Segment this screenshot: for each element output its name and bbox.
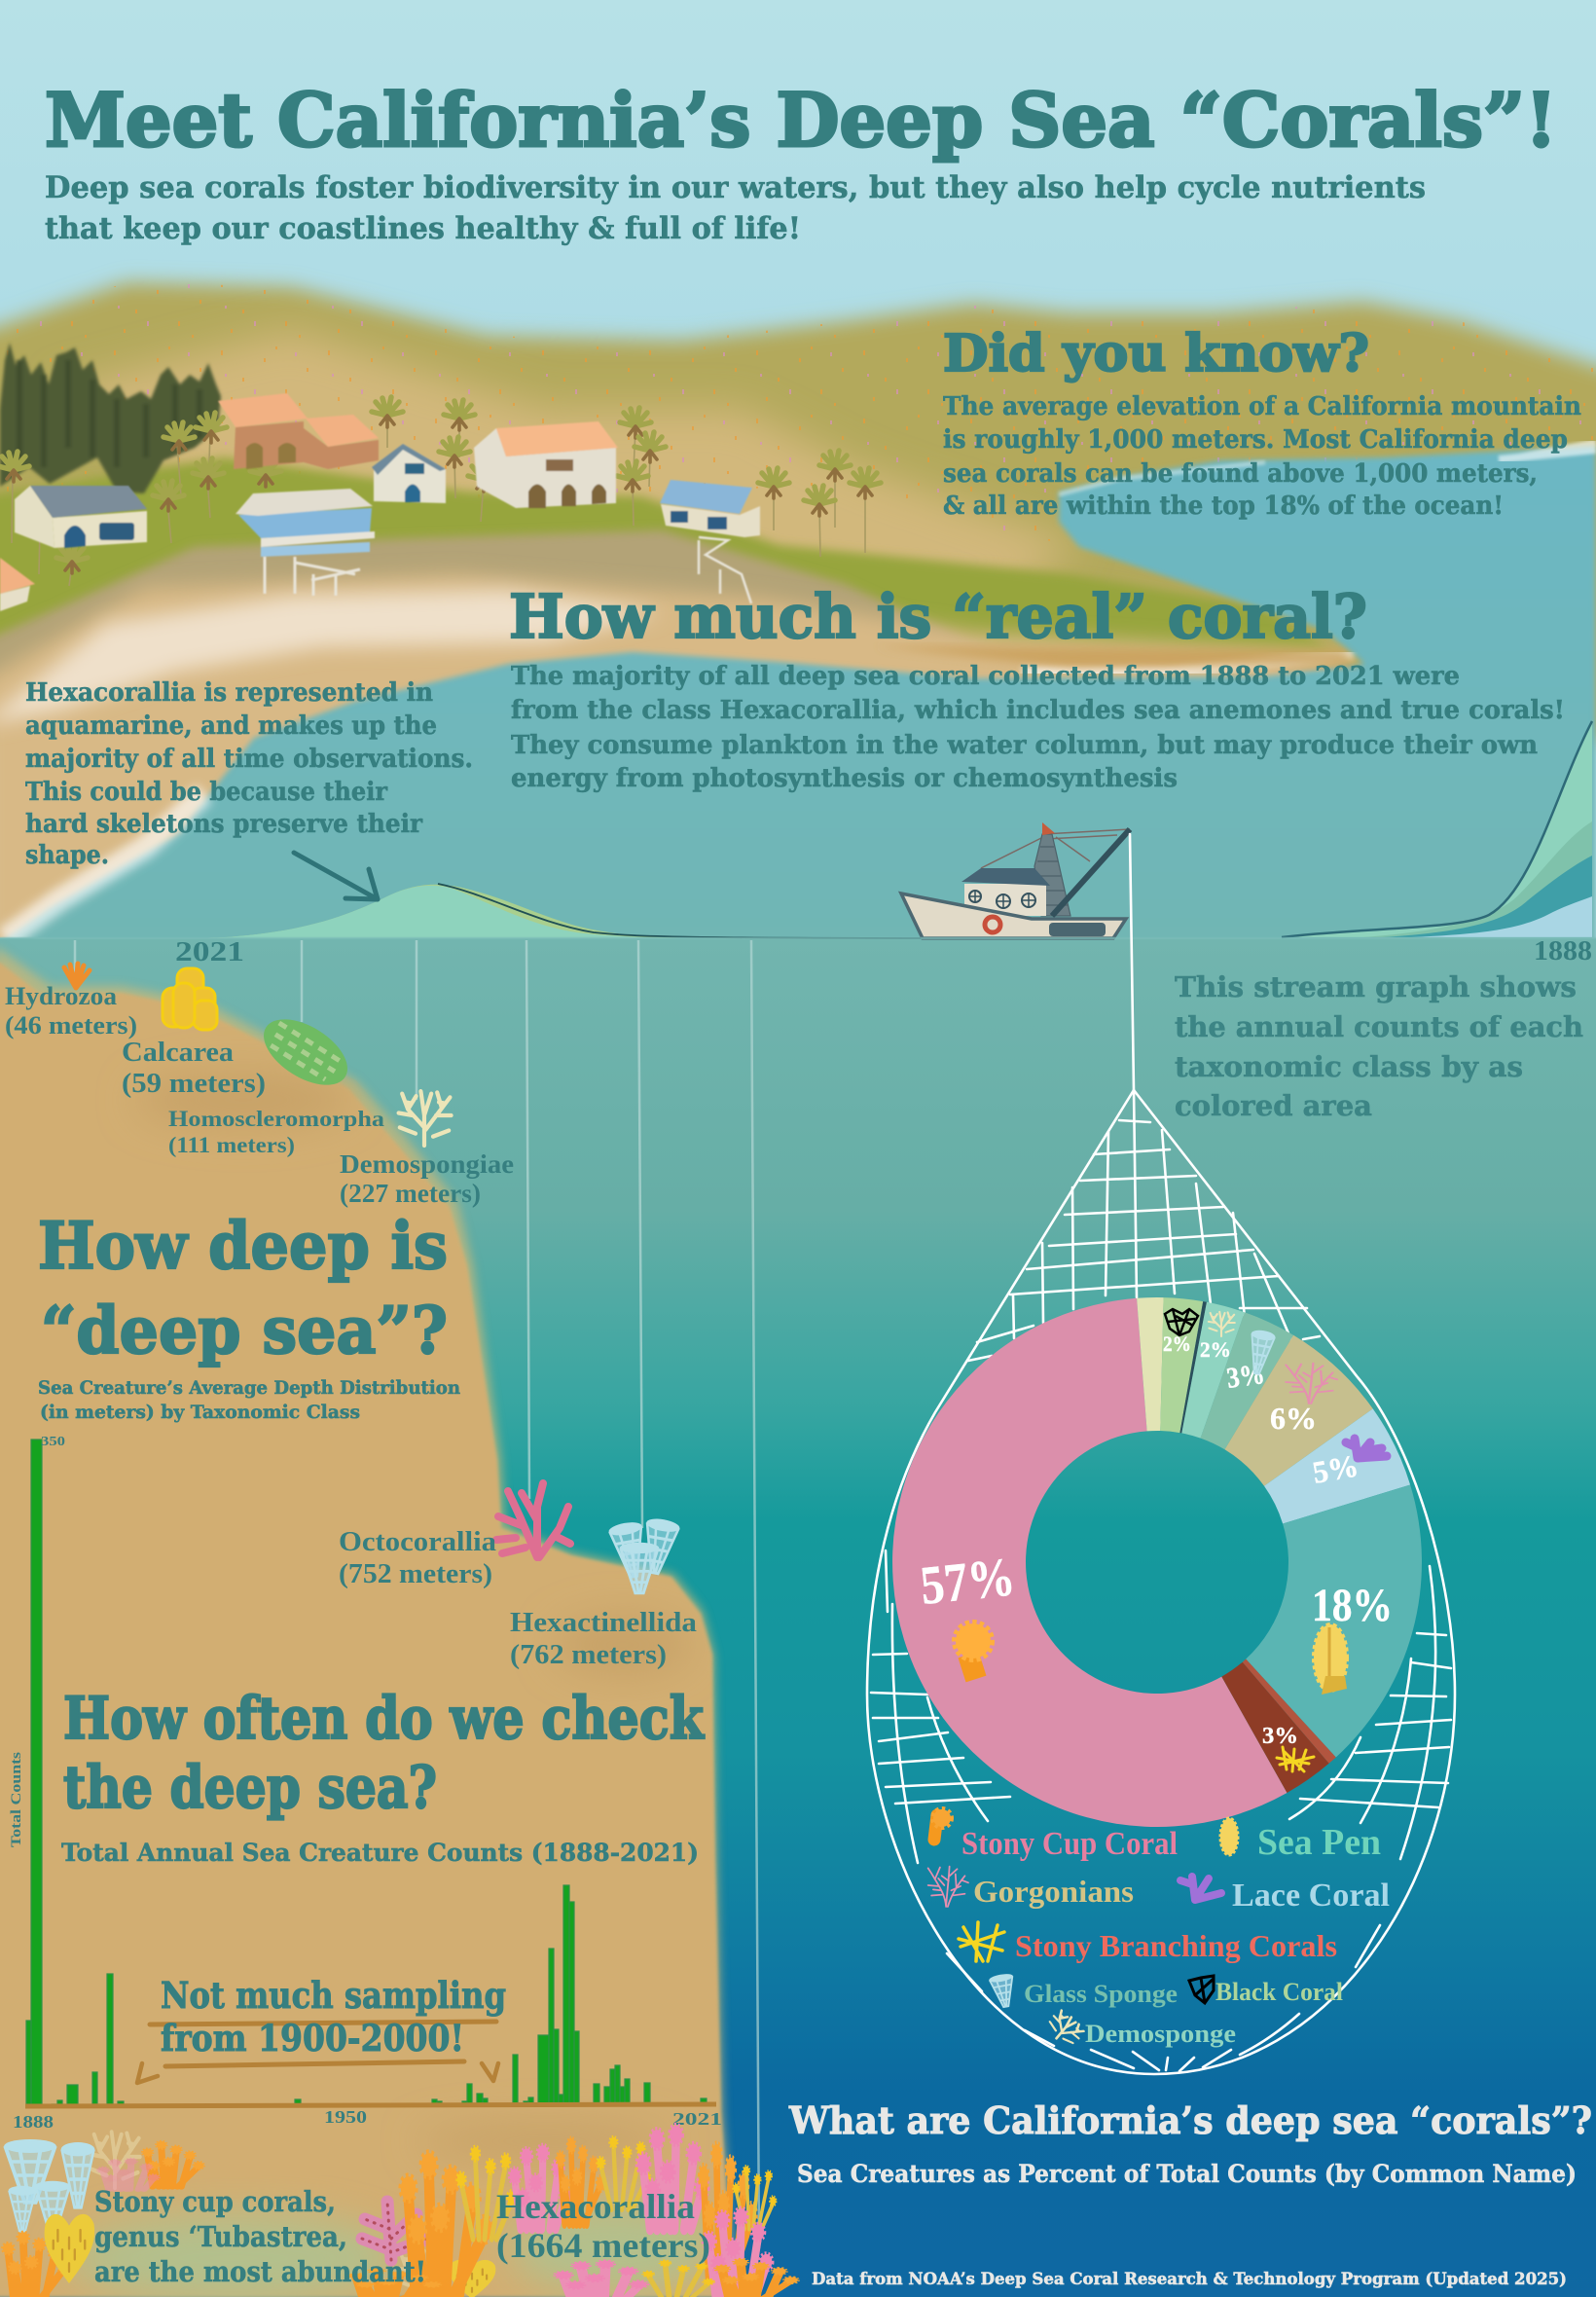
callout: not much sampling: Not much sampling xyxy=(161,1974,506,2017)
label: homoscleromorpha xyxy=(168,1107,385,1157)
slice: black coral 2% xyxy=(1160,1297,1203,1433)
x axis labels: 1888 xyxy=(13,2112,54,2132)
stream graph note: colored area xyxy=(1175,1089,1372,1122)
boat: rigging xyxy=(981,829,1130,868)
house: orange xyxy=(218,393,379,469)
label: hexacorallia: Hexacorallia xyxy=(496,2187,695,2226)
boat: flag xyxy=(1042,822,1055,835)
glow behind bottom text xyxy=(68,2205,715,2297)
how deep subtitle: (in meters) by Taxonomic Class xyxy=(40,1402,360,1423)
legend: gorgonians: Gorgonians xyxy=(973,1874,1134,1909)
slice: pale sliver xyxy=(1137,1297,1164,1431)
right coral reef xyxy=(349,2126,798,2297)
real coral text xyxy=(511,662,1565,793)
percent labels: 57% xyxy=(918,1547,1018,1617)
legend: stony cup coral xyxy=(933,1809,1178,1862)
icon: stony branching coral xyxy=(1277,1747,1314,1771)
left sponges xyxy=(4,2139,94,2231)
label: hexactinellida: (762 meters) xyxy=(510,1640,667,1670)
callout: not much sampling xyxy=(137,1974,506,2083)
label: hydrozoa xyxy=(5,982,137,1039)
arrow: left xyxy=(137,2063,158,2083)
legend: glass sponge xyxy=(989,1973,1178,2009)
label: hydrozoa: Hydrozoa xyxy=(5,982,117,1010)
abundance note xyxy=(94,2185,426,2288)
stream graph note: This stream graph shows xyxy=(1175,970,1577,1003)
legend: glass sponge: Glass Sponge xyxy=(1024,1980,1178,2008)
bar chart xyxy=(9,1435,722,2132)
arrow to stream bump xyxy=(294,853,378,899)
icon: octocorallia xyxy=(496,1483,570,1557)
stream graph note: the annual counts of each xyxy=(1175,1010,1583,1043)
slice: stony branching corals 3% xyxy=(1221,1662,1329,1793)
road xyxy=(0,530,1168,720)
how often heading: the deep sea? xyxy=(63,1754,437,1822)
did you know text: is roughly 1,000 meters. Most California deep xyxy=(943,425,1568,455)
subtitle: Deep sea corals foster biodiversity in our waters, but they also help cycle nutrients xyxy=(45,170,1426,205)
hills xyxy=(0,282,1596,740)
icon: hexactinellida xyxy=(608,1516,680,1593)
icon: sea pen xyxy=(1314,1624,1347,1695)
y axis label: Total Counts xyxy=(9,1752,24,1847)
real coral text: from the class Hexacorallia, which includes sea anemones and true corals! xyxy=(511,696,1565,725)
net: lower mesh xyxy=(871,1550,1451,2071)
house: gray xyxy=(15,486,147,548)
legend: stony branching corals: Stony Branching Corals xyxy=(1015,1928,1337,1963)
percent labels: 3% xyxy=(1262,1724,1298,1749)
subtitle: that keep our coastlines healthy & full of life! xyxy=(45,211,801,246)
boat: mast xyxy=(1034,834,1070,916)
real coral text: The majority of all deep sea coral collected from 1888 to 2021 were xyxy=(511,662,1460,691)
did you know text xyxy=(943,392,1581,521)
house: blue with stilts xyxy=(236,489,375,596)
abundance note: Stony cup corals, xyxy=(94,2185,336,2218)
how often subtitle: Total Annual Sea Creature Counts (1888-2021) xyxy=(61,1839,699,1867)
did you know heading: Did you know? xyxy=(943,324,1369,383)
label: hexactinellida xyxy=(510,1608,697,1670)
house: partial left xyxy=(0,558,35,611)
arrow: right xyxy=(482,2063,498,2081)
label: demospongiae: Demospongiae xyxy=(340,1149,514,1179)
real coral text: They consume plankton in the water column, but may produce their own xyxy=(511,731,1538,760)
label: homoscleromorpha: (111 meters) xyxy=(168,1133,295,1157)
trees xyxy=(0,343,221,493)
icon: calcarea xyxy=(163,968,217,1030)
icon: black coral xyxy=(1165,1309,1198,1335)
pale beach highlight xyxy=(0,590,662,725)
pale branch corals xyxy=(91,2132,441,2297)
slice: lace coral 5% xyxy=(1264,1408,1410,1524)
stream graph year labels: 1888 xyxy=(1534,936,1592,966)
slice: stony cup coral 57% xyxy=(892,1298,1287,1827)
how deep heading xyxy=(38,1208,448,1368)
slice: glass sponge 3% xyxy=(1201,1312,1293,1449)
label: octocorallia: Octocorallia xyxy=(339,1527,496,1557)
percent labels: 6% xyxy=(1270,1401,1317,1436)
slice: demosponge 2% xyxy=(1181,1302,1245,1439)
slice: sea pen 18% xyxy=(1246,1485,1422,1758)
legend: sea pen: Sea Pen xyxy=(1257,1822,1381,1863)
hexacorallia note: shape. xyxy=(25,841,109,870)
callout: not much sampling: from 1900-2000! xyxy=(161,2017,464,2060)
icon: stony cup coral xyxy=(956,1623,991,1679)
stream graph note xyxy=(1175,970,1583,1122)
percent labels xyxy=(918,1331,1393,1749)
label: demospongiae xyxy=(340,1149,514,1208)
horizon depth lines xyxy=(75,940,759,2248)
legend: gorgonians xyxy=(928,1867,1134,1909)
depth labels xyxy=(5,982,697,1670)
net: upper mesh xyxy=(968,1090,1320,1361)
house: small gable xyxy=(372,444,446,503)
x axis xyxy=(25,2104,716,2106)
dotted pink coral xyxy=(362,2202,428,2260)
icon: homoscleromorpha xyxy=(253,1006,358,1098)
stream graph note: taxonomic class by as xyxy=(1175,1050,1523,1083)
stream: early bump xyxy=(208,885,681,938)
boat: crane xyxy=(1052,829,1130,916)
stream graph xyxy=(208,721,1592,938)
house: blue roof xyxy=(660,480,760,603)
x axis labels xyxy=(13,2107,722,2132)
how deep heading: How deep is xyxy=(38,1208,448,1284)
surf foam xyxy=(5,443,1596,939)
palms xyxy=(0,397,881,586)
icon: glass sponge xyxy=(1245,1329,1276,1375)
bars xyxy=(26,1440,707,2105)
legend: lace coral: Lace Coral xyxy=(1232,1878,1390,1914)
percent labels: 18% xyxy=(1312,1580,1393,1631)
stream graph year labels: 2021 xyxy=(175,937,244,967)
boat: hull xyxy=(901,893,1126,938)
coral garden xyxy=(3,2126,798,2297)
slice: gorgonians 6% xyxy=(1224,1335,1373,1486)
depth icons xyxy=(64,964,680,1593)
label: hexacorallia: (1664 meters) xyxy=(496,2226,710,2265)
percent labels: 2% xyxy=(1163,1331,1191,1356)
x axis labels: 2021 xyxy=(672,2109,722,2129)
legend: demosponge xyxy=(1044,2008,1236,2050)
data source: Data from NOAA’s Deep Sea Coral Research & Technology Program (Updated 2025) xyxy=(812,2270,1567,2289)
icon: demospongiae xyxy=(399,1091,452,1146)
icon: gorgonian xyxy=(1286,1364,1337,1404)
upper bay water xyxy=(0,446,1596,973)
x axis labels: 1950 xyxy=(324,2107,367,2127)
label: calcarea: (59 meters) xyxy=(122,1069,266,1099)
slice: dark divider xyxy=(1179,1301,1207,1433)
donut icons xyxy=(956,1309,1387,1771)
label: hexactinellida: Hexactinellida xyxy=(510,1608,697,1638)
boat xyxy=(901,822,1130,938)
label: demospongiae: (227 meters) xyxy=(340,1179,481,1208)
label: hexacorallia xyxy=(496,2187,710,2265)
seafloor shading xyxy=(173,1076,666,1664)
label: octocorallia: (752 meters) xyxy=(339,1559,492,1589)
hexacorallia note: aquamarine, and makes up the xyxy=(25,711,437,741)
subtitle xyxy=(45,170,1426,246)
legend: black coral: Black Coral xyxy=(1215,1978,1343,2006)
how deep heading: “deep sea”? xyxy=(41,1293,448,1368)
did you know text: sea corals can be found above 1,000 meters, xyxy=(943,459,1538,489)
percent labels: 3% xyxy=(1224,1358,1267,1395)
hexacorallia note: majority of all time observations. xyxy=(25,745,473,774)
did you know text: The average elevation of a California mountain xyxy=(943,392,1581,421)
hexacorallia note xyxy=(25,678,473,870)
real coral heading: How much is “real” coral? xyxy=(509,581,1367,652)
percent labels: 2% xyxy=(1200,1337,1231,1362)
sand patch behind text xyxy=(876,646,1358,668)
real coral text: energy from photosynthesis or chemosynthesis xyxy=(511,764,1178,793)
title: Meet California’s Deep Sea “Corals”! xyxy=(45,77,1557,164)
icon: lace coral xyxy=(1346,1439,1387,1458)
top value label: 350 xyxy=(41,1435,65,1449)
label: hydrozoa: (46 meters) xyxy=(5,1011,137,1039)
horizon line xyxy=(0,937,1596,939)
icon: hydrozoa xyxy=(64,964,90,988)
stream graph year labels xyxy=(175,936,1592,967)
boat: cabin xyxy=(964,884,1046,916)
lower sea xyxy=(0,938,1596,2297)
beach xyxy=(0,574,1382,973)
label: octocorallia xyxy=(339,1527,496,1589)
icon: demosponge xyxy=(1209,1312,1235,1336)
legend: sea pen xyxy=(1220,1818,1381,1863)
legend: demosponge: Demosponge xyxy=(1085,2020,1236,2048)
hearts xyxy=(45,2214,495,2297)
sky background xyxy=(0,0,1596,681)
label: calcarea: Calcarea xyxy=(122,1038,234,1068)
how deep subtitle: Sea Creature’s Average Depth Distribution xyxy=(38,1377,460,1399)
how often heading: How often do we check xyxy=(63,1685,705,1753)
legend: stony cup coral: Stony Cup Coral xyxy=(961,1826,1178,1862)
donut chart xyxy=(892,1297,1422,1827)
label: calcarea xyxy=(122,1038,266,1099)
did you know text: & all are within the top 18% of the ocean! xyxy=(943,492,1504,521)
how deep subtitle xyxy=(38,1377,460,1423)
hexacorallia note: Hexacorallia is represented in xyxy=(25,678,433,708)
slice: red sliver xyxy=(1243,1659,1336,1764)
abundance note: are the most abundant! xyxy=(94,2255,426,2288)
fishing net xyxy=(867,834,1455,2074)
house: large orange roof xyxy=(474,421,618,508)
seafloor cliff xyxy=(0,959,740,2297)
stream: recent rise xyxy=(1282,721,1592,937)
how often heading xyxy=(63,1685,705,1822)
faded left corals xyxy=(3,2141,203,2297)
hexacorallia note: hard skeletons preserve their xyxy=(25,810,422,839)
net: tow line xyxy=(1130,834,1134,1090)
donut legend xyxy=(928,1809,1390,2050)
seafloor edge glow xyxy=(0,946,742,2297)
hexacorallia note: This could be because their xyxy=(25,778,387,807)
label: homoscleromorpha: Homoscleromorpha xyxy=(168,1107,385,1131)
grass slope xyxy=(0,457,1362,681)
percent labels: 5% xyxy=(1310,1447,1361,1490)
net: outline xyxy=(867,1090,1455,2074)
abundance note: genus ‘Tubastrea, xyxy=(94,2220,347,2253)
